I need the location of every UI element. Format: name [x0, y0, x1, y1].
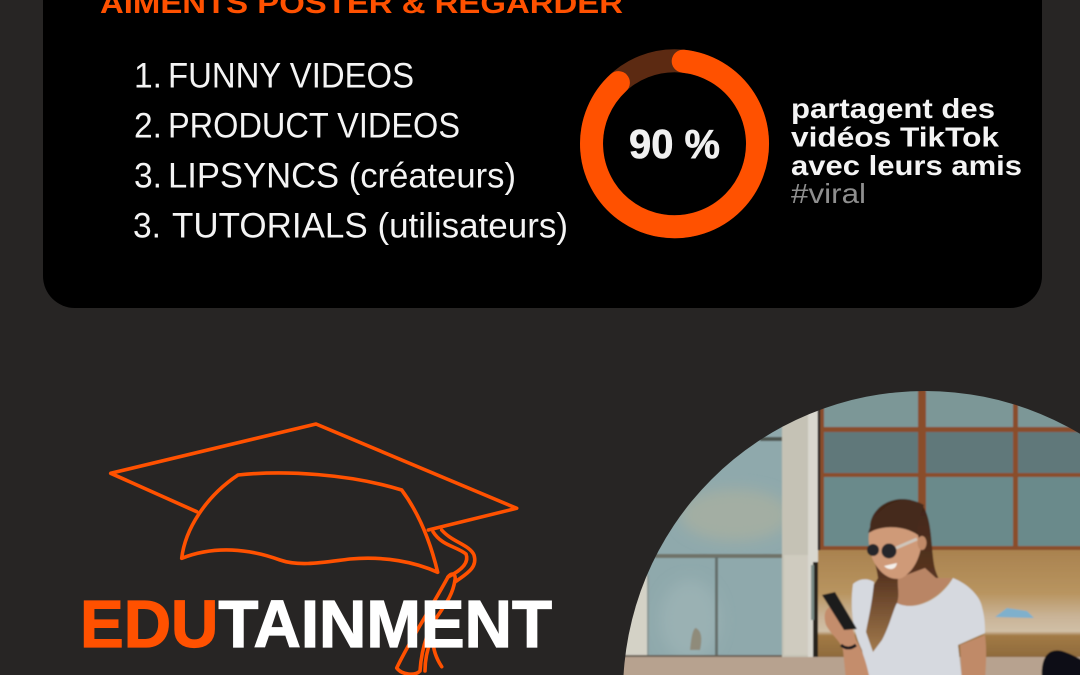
hair back	[859, 499, 940, 652]
phone	[822, 592, 857, 630]
ranked list of video types: 3.	[134, 156, 162, 196]
window panes	[820, 380, 1080, 430]
concrete wall	[646, 426, 783, 656]
neck	[897, 568, 952, 606]
ranked list of video types: TUTORIALS (utilisateurs)	[172, 206, 568, 246]
text block: sharing stat: partagent des	[791, 93, 995, 124]
shirt	[852, 578, 985, 675]
ranked list of video types: 1.	[134, 56, 162, 96]
ranked list of video types: FUNNY VIDEOS	[168, 56, 414, 96]
sunglasses	[867, 544, 879, 556]
ranked list of video types: 3.	[133, 206, 161, 246]
arms and hand	[825, 606, 870, 675]
donut chart: 90 %: 90 %	[629, 121, 720, 167]
wooden bench wall	[818, 550, 1080, 657]
panel: top formats and sharing	[43, 0, 1042, 308]
floor	[620, 657, 1080, 675]
ranked list of video types: LIPSYNCS (créateurs)	[168, 156, 516, 196]
wristband	[841, 645, 856, 648]
ranked list of video types	[133, 56, 568, 246]
text block: sharing stat: #viral	[791, 178, 866, 209]
ear	[918, 536, 926, 550]
icon: graduation cap	[111, 424, 517, 674]
window frame	[820, 380, 1080, 550]
smile	[884, 563, 897, 569]
text block: sharing stat: vidéos TikTok	[791, 122, 999, 152]
ranked list of video types: PRODUCT VIDEOS	[168, 106, 460, 146]
text block: sharing stat	[791, 93, 1022, 209]
concrete pillar	[780, 414, 809, 658]
text block: sharing stat: avec leurs amis	[791, 150, 1022, 181]
face	[869, 527, 921, 579]
hair fringe	[868, 500, 924, 535]
donut chart: 90 %	[592, 61, 758, 227]
dark bag	[1042, 650, 1080, 675]
ranked list of video types: 2.	[134, 106, 162, 146]
title: EDUTAINMENT: EDUTAINMENT	[80, 587, 552, 662]
photo: woman smiling at her phone	[620, 380, 1080, 675]
